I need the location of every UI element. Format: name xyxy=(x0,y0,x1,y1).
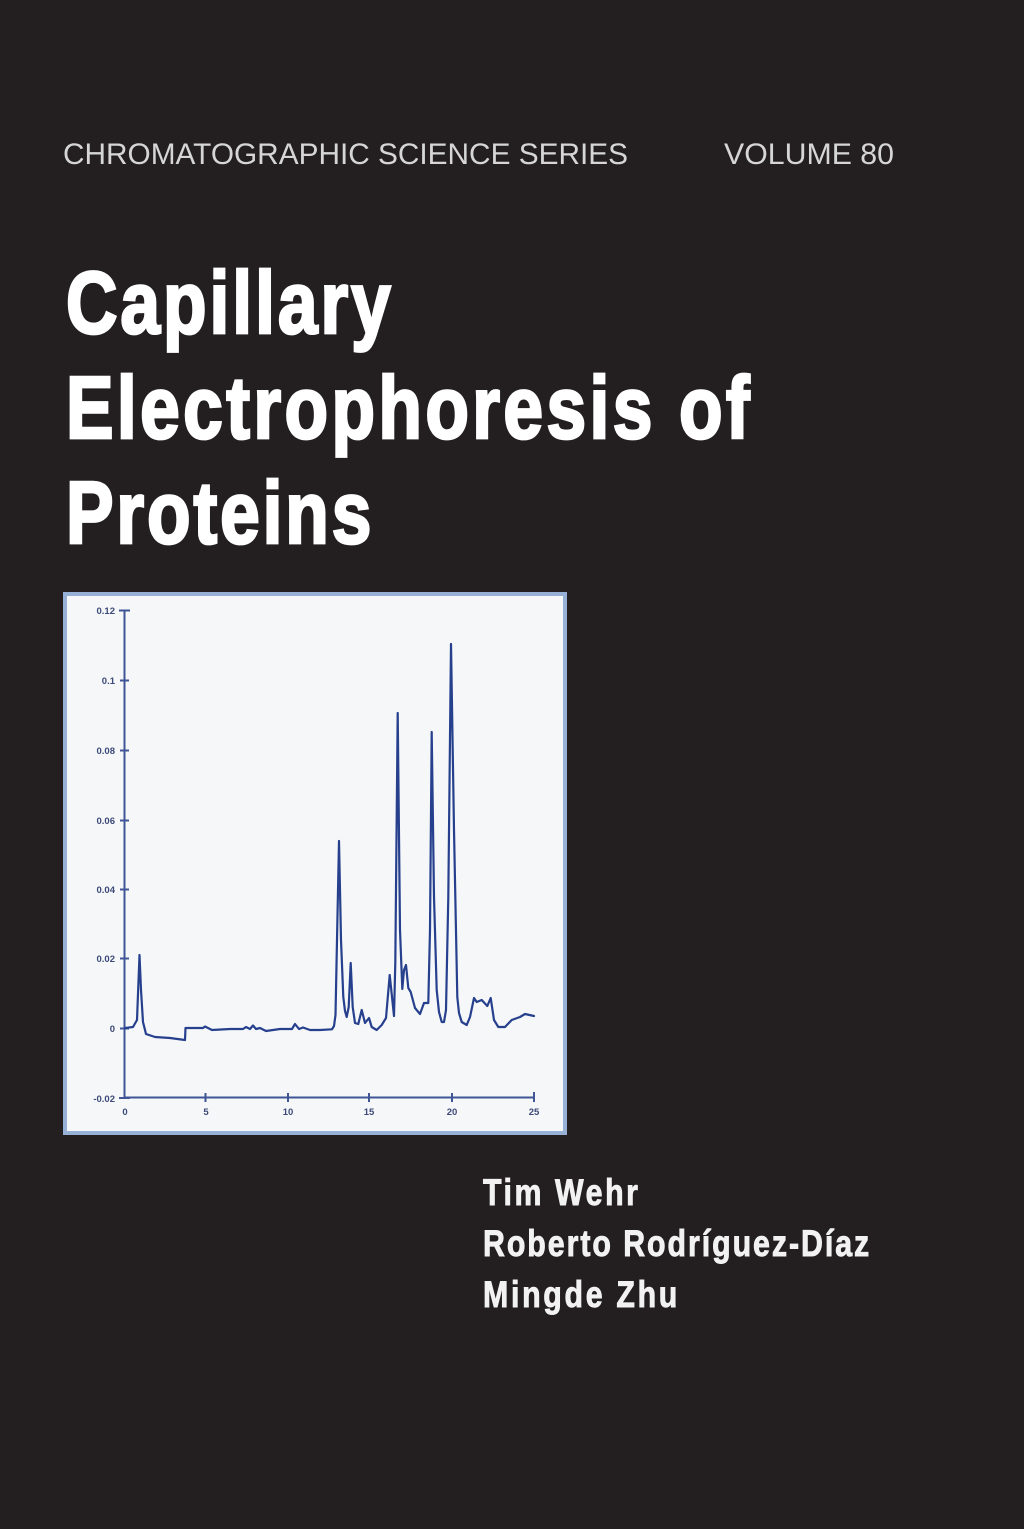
authors: Roberto Rodríguez-Díaz xyxy=(483,1223,869,1265)
data trace xyxy=(125,644,534,1040)
authors: Mingde Zhu xyxy=(483,1274,677,1316)
authors: Tim Wehr xyxy=(483,1172,638,1214)
y axis labels: 0 xyxy=(110,1024,115,1035)
title: Proteins xyxy=(66,464,371,562)
y axis labels: 0.08 xyxy=(96,746,115,757)
x axis labels: 10 xyxy=(283,1107,293,1118)
title xyxy=(66,254,750,562)
x axis with ticks xyxy=(124,1092,534,1102)
title: Electrophoresis of xyxy=(66,359,750,457)
x axis labels xyxy=(122,1107,540,1118)
title: Capillary xyxy=(66,254,391,352)
series name: CHROMATOGRAPHIC SCIENCE SERIES xyxy=(63,138,628,171)
x axis labels: 0 xyxy=(122,1107,128,1118)
x axis labels: 20 xyxy=(447,1107,457,1118)
y axis labels: 0.1 xyxy=(102,676,116,687)
y axis with ticks xyxy=(119,610,130,1098)
authors xyxy=(483,1172,869,1316)
y axis labels: 0.06 xyxy=(96,816,115,827)
chart panel: electropherogram xyxy=(65,594,565,1133)
y axis labels: 0.12 xyxy=(96,606,115,617)
x axis labels: 15 xyxy=(364,1107,375,1118)
panel frame xyxy=(65,594,565,1133)
y axis labels: 0.04 xyxy=(96,885,116,896)
y axis labels xyxy=(93,606,116,1105)
volume number: VOLUME 80 xyxy=(724,138,894,171)
y axis labels: -0.02 xyxy=(93,1094,115,1105)
x axis labels: 25 xyxy=(529,1107,540,1118)
x axis labels: 5 xyxy=(203,1107,209,1118)
y axis labels: 0.02 xyxy=(96,954,115,965)
